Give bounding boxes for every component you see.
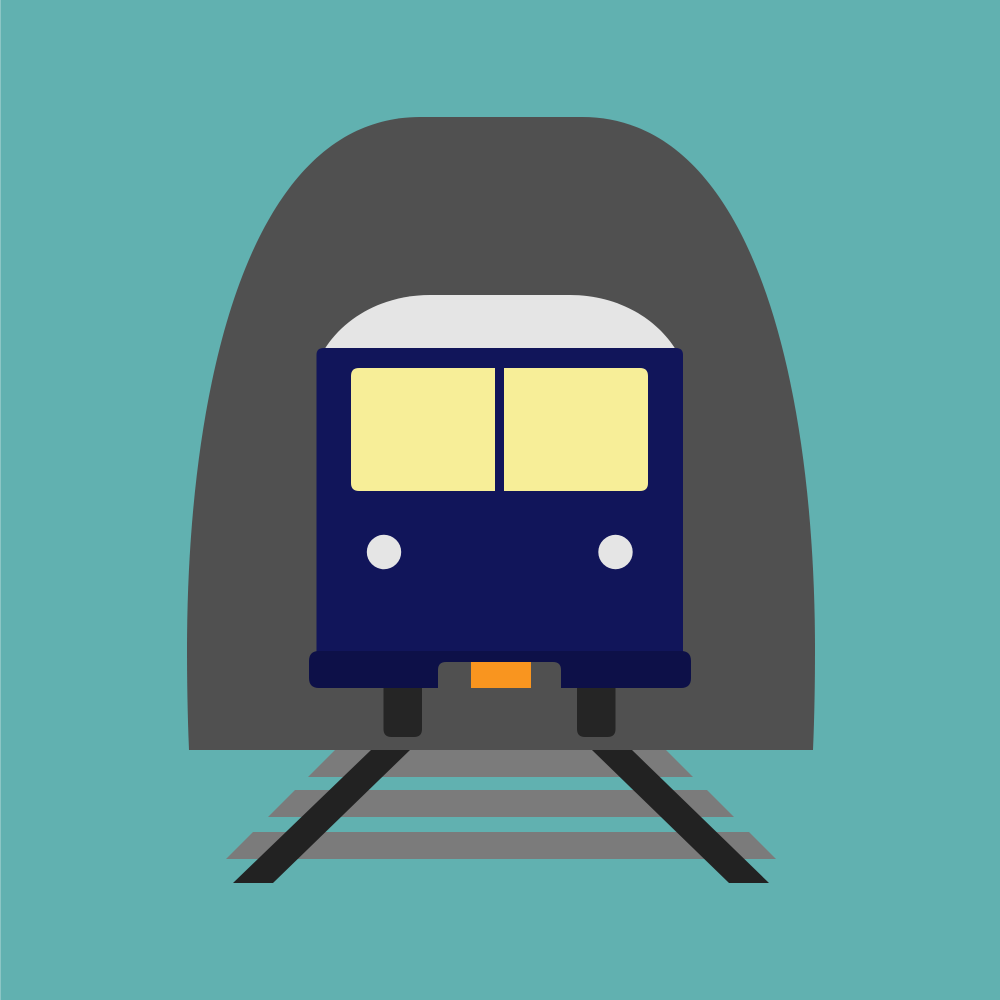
train body bbox=[316, 348, 683, 660]
railway rails bbox=[233, 750, 769, 883]
train bbox=[309, 295, 691, 737]
train roof bbox=[324, 295, 676, 350]
bumper bbox=[309, 651, 691, 688]
right wheel support bbox=[577, 680, 616, 737]
left wheel support bbox=[384, 680, 422, 737]
tunnel bbox=[187, 117, 815, 750]
left headlight bbox=[367, 535, 401, 569]
railway sleepers bbox=[226, 750, 776, 859]
right window bbox=[504, 368, 648, 491]
right headlight bbox=[598, 535, 633, 569]
orange number plate bbox=[471, 662, 531, 688]
left window bbox=[351, 368, 495, 491]
